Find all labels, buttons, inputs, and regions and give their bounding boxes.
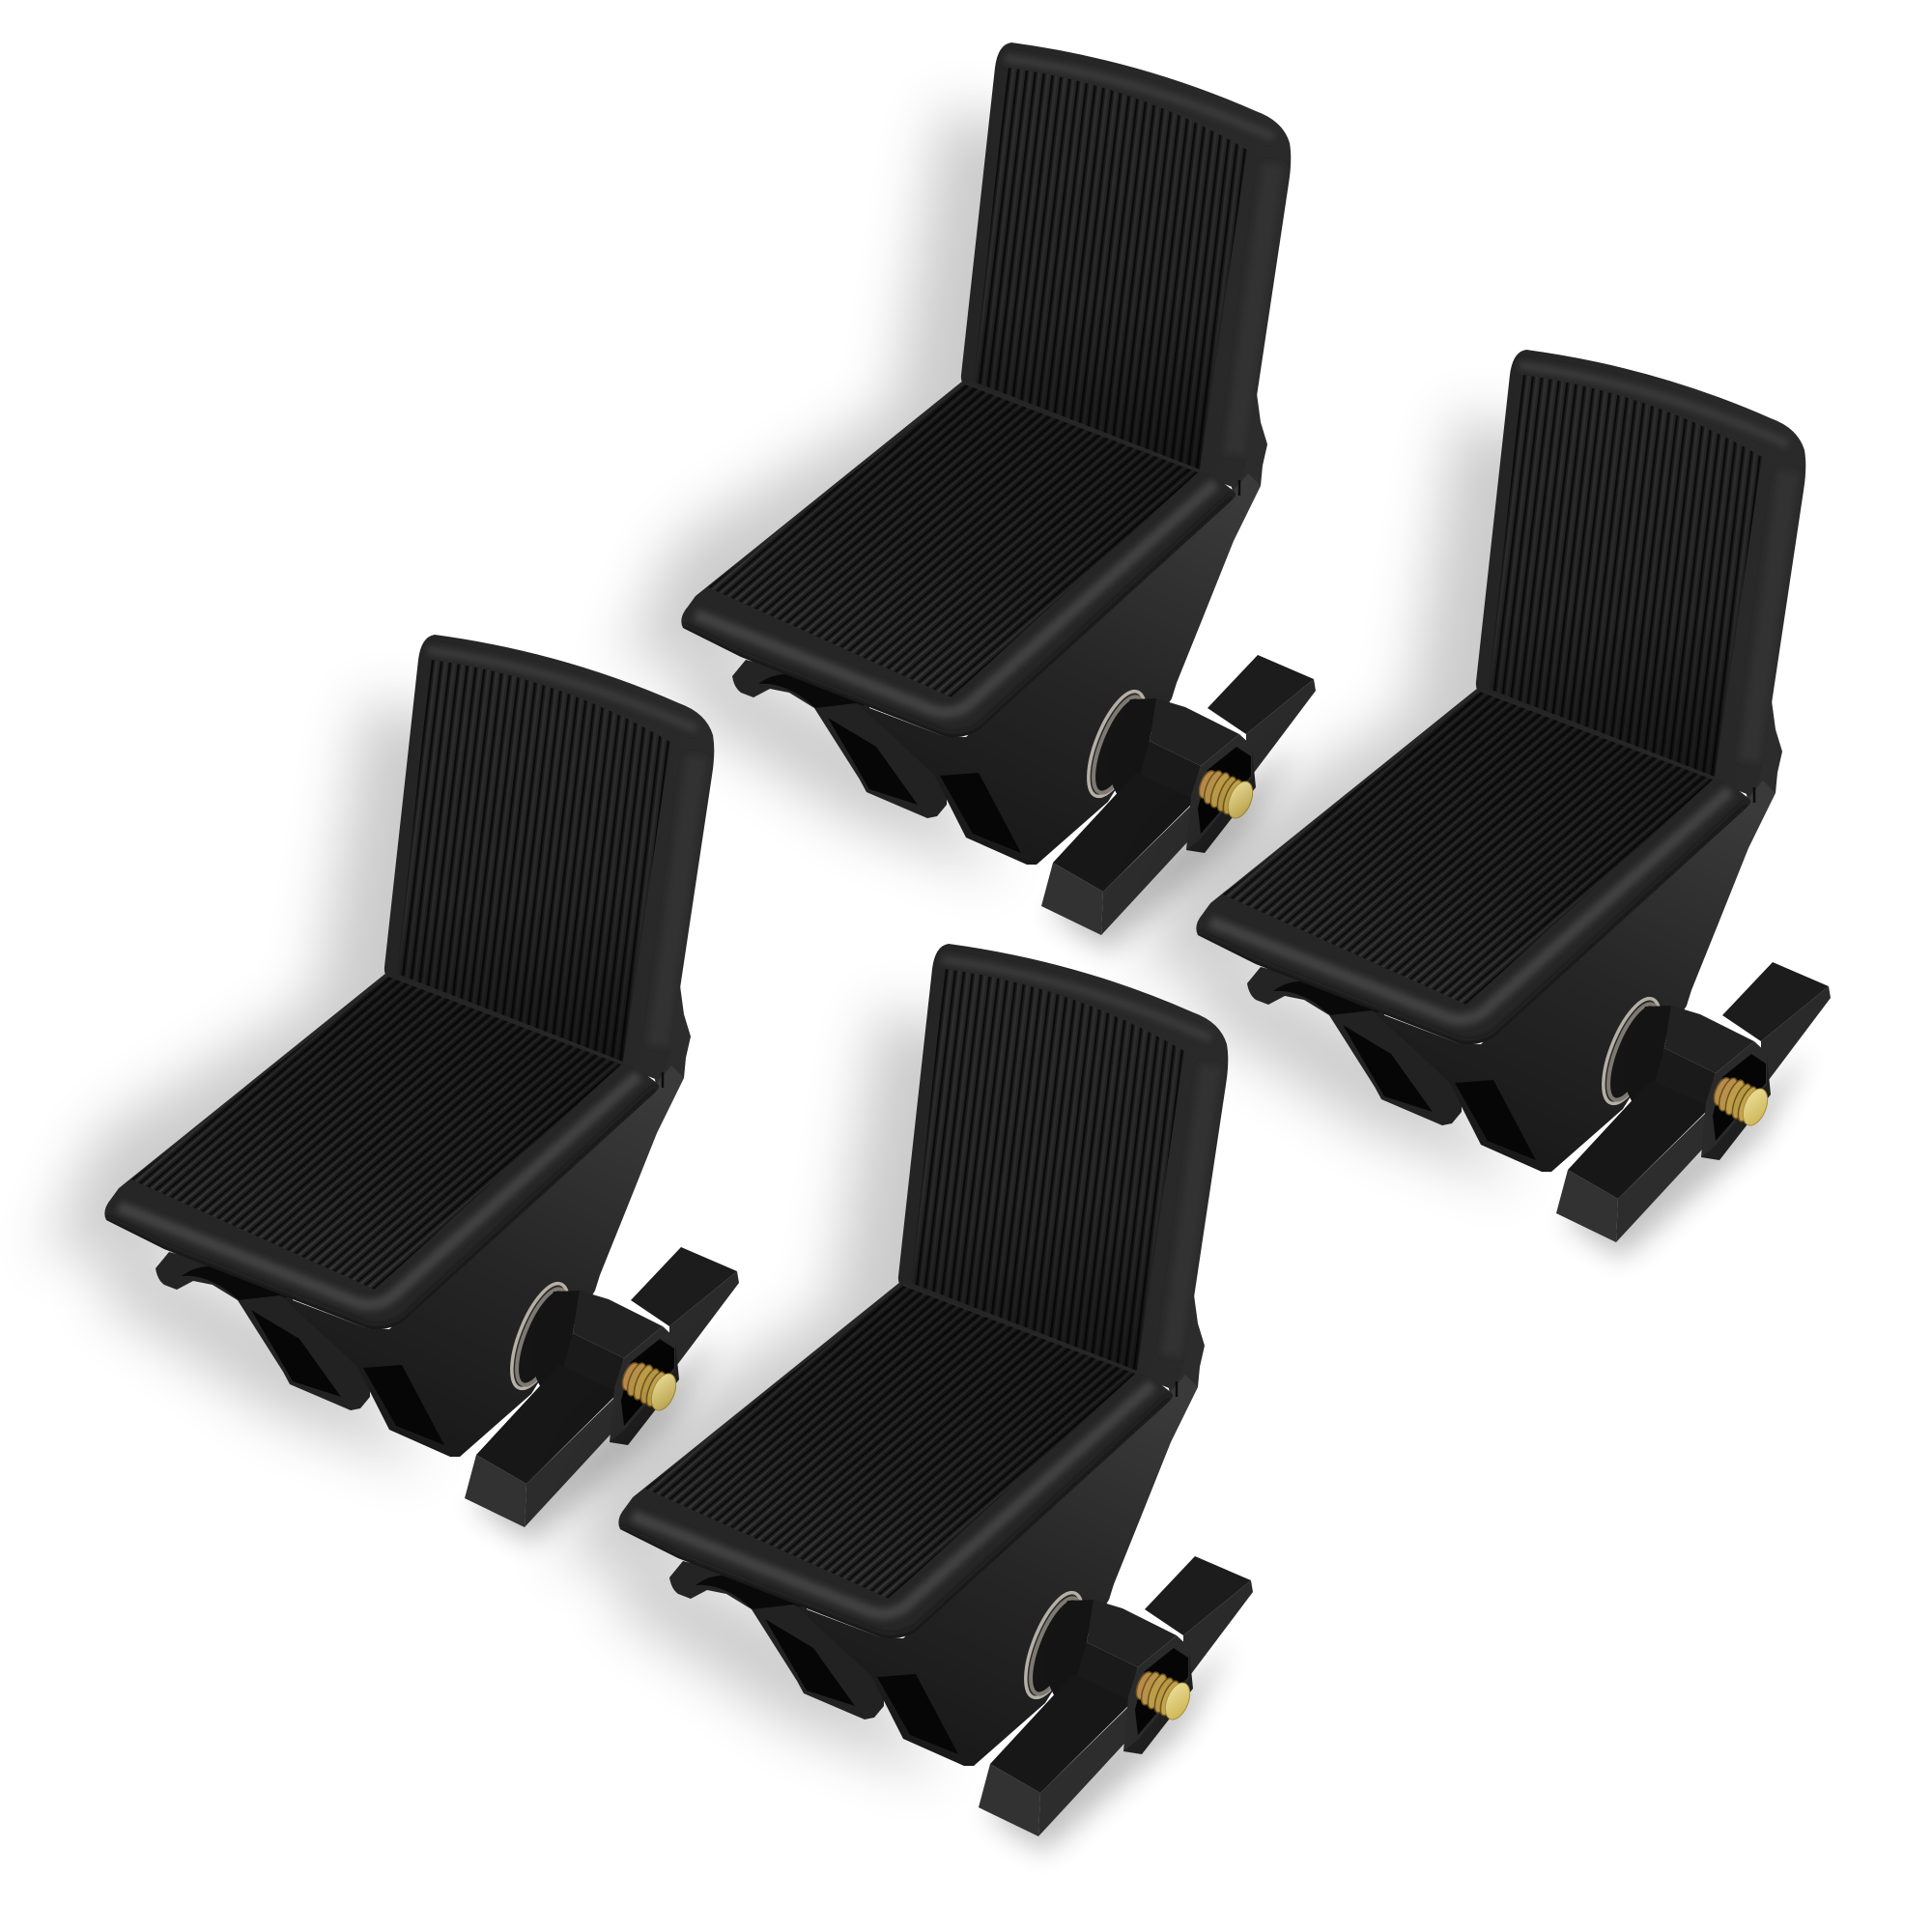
brass bolt (1711, 1075, 1773, 1129)
mount: bottom (555, 944, 1253, 1853)
brass bolt (1196, 768, 1258, 822)
ribbed backrest (384, 635, 714, 1088)
ribbed backrest (961, 43, 1291, 496)
base with tubes (156, 979, 691, 1457)
shadow (1133, 413, 1809, 1259)
wing handle (1041, 655, 1316, 935)
mount: right (1133, 350, 1831, 1259)
ribbed foot plate (104, 973, 659, 1329)
mount: left (42, 635, 739, 1544)
brass bolt (619, 1360, 681, 1414)
wing handle (465, 1247, 739, 1527)
wing handle (979, 1556, 1253, 1836)
ribbed foot plate (1196, 688, 1750, 1044)
shadow (42, 698, 718, 1544)
ribbed backrest (1476, 350, 1805, 803)
ribbed backrest (898, 944, 1228, 1397)
base with tubes (1247, 694, 1782, 1172)
ribbed foot plate (618, 1282, 1173, 1638)
base with tubes (669, 1288, 1205, 1766)
shadow (618, 106, 1294, 952)
base with tubes (732, 386, 1267, 865)
ribbed foot plate (681, 381, 1236, 737)
wing handle (1556, 962, 1831, 1242)
shadow (555, 1008, 1232, 1853)
brass bolt (1133, 1669, 1195, 1723)
mount: top (618, 43, 1316, 952)
